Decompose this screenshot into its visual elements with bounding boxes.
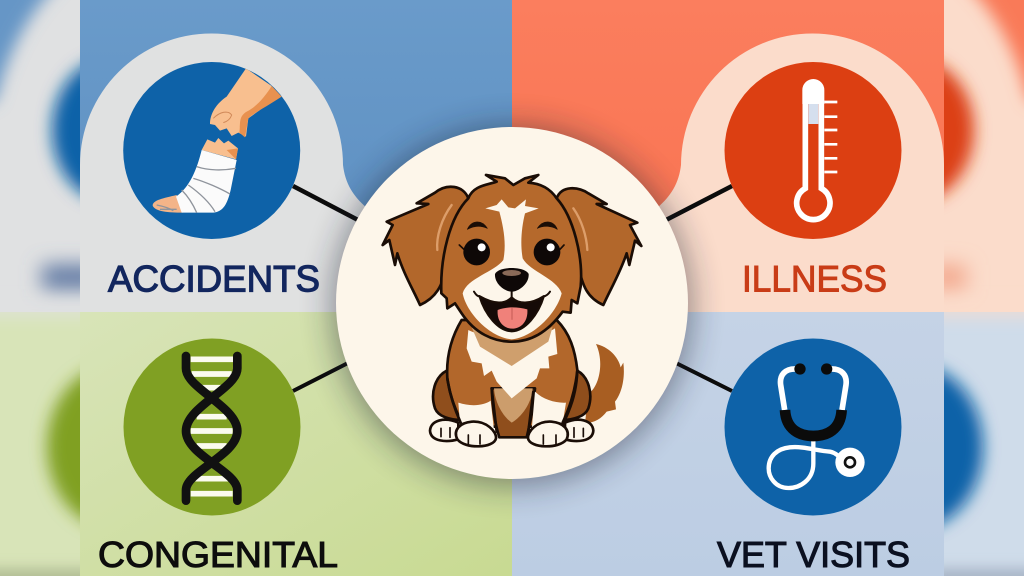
puppy belly — [492, 388, 535, 437]
label: illness: ILLNESS — [742, 258, 887, 300]
icon: dna helix — [186, 356, 237, 501]
icon: thermometer — [797, 79, 837, 220]
puppy eyes — [459, 239, 564, 265]
center circle — [336, 127, 688, 479]
connector: congenital — [293, 363, 348, 391]
left blurred side strip — [0, 0, 80, 576]
panel: illness quadrant — [512, 0, 944, 312]
badge: accidents — [123, 62, 300, 239]
icon: puppy — [383, 175, 641, 446]
puppy nose — [495, 268, 529, 292]
badge: congenital — [124, 338, 300, 516]
puppy brows — [467, 222, 557, 229]
label: accidents: ACCIDENTS — [108, 258, 320, 300]
panel: vet visits quadrant — [512, 312, 944, 576]
label: congenital: CONGENITAL — [98, 534, 338, 575]
puppy head — [441, 175, 581, 342]
puppy chest — [467, 328, 557, 398]
puppy front legs — [447, 370, 577, 432]
badge: vet visits — [724, 338, 902, 516]
right blurred side strip — [944, 0, 1024, 576]
label: vet visits: VET VISITS — [717, 534, 910, 575]
puppy mouth — [479, 296, 544, 331]
icon: bandaged leg — [153, 68, 282, 213]
panel: congenital quadrant — [80, 312, 512, 576]
puppy muzzle and blaze — [463, 199, 562, 339]
puppy paws — [430, 420, 593, 446]
connector: accidents — [293, 186, 358, 220]
panel: accidents quadrant — [80, 0, 512, 312]
puppy ears — [383, 187, 641, 305]
center circle shadow — [332, 126, 692, 486]
puppy haunches — [433, 371, 590, 420]
puppy body — [447, 320, 577, 427]
badge: illness — [724, 62, 902, 239]
connector: illness — [666, 186, 732, 220]
icon: stethoscope — [769, 363, 865, 488]
puppy tail — [585, 344, 624, 423]
connector: vet visits — [676, 363, 732, 391]
